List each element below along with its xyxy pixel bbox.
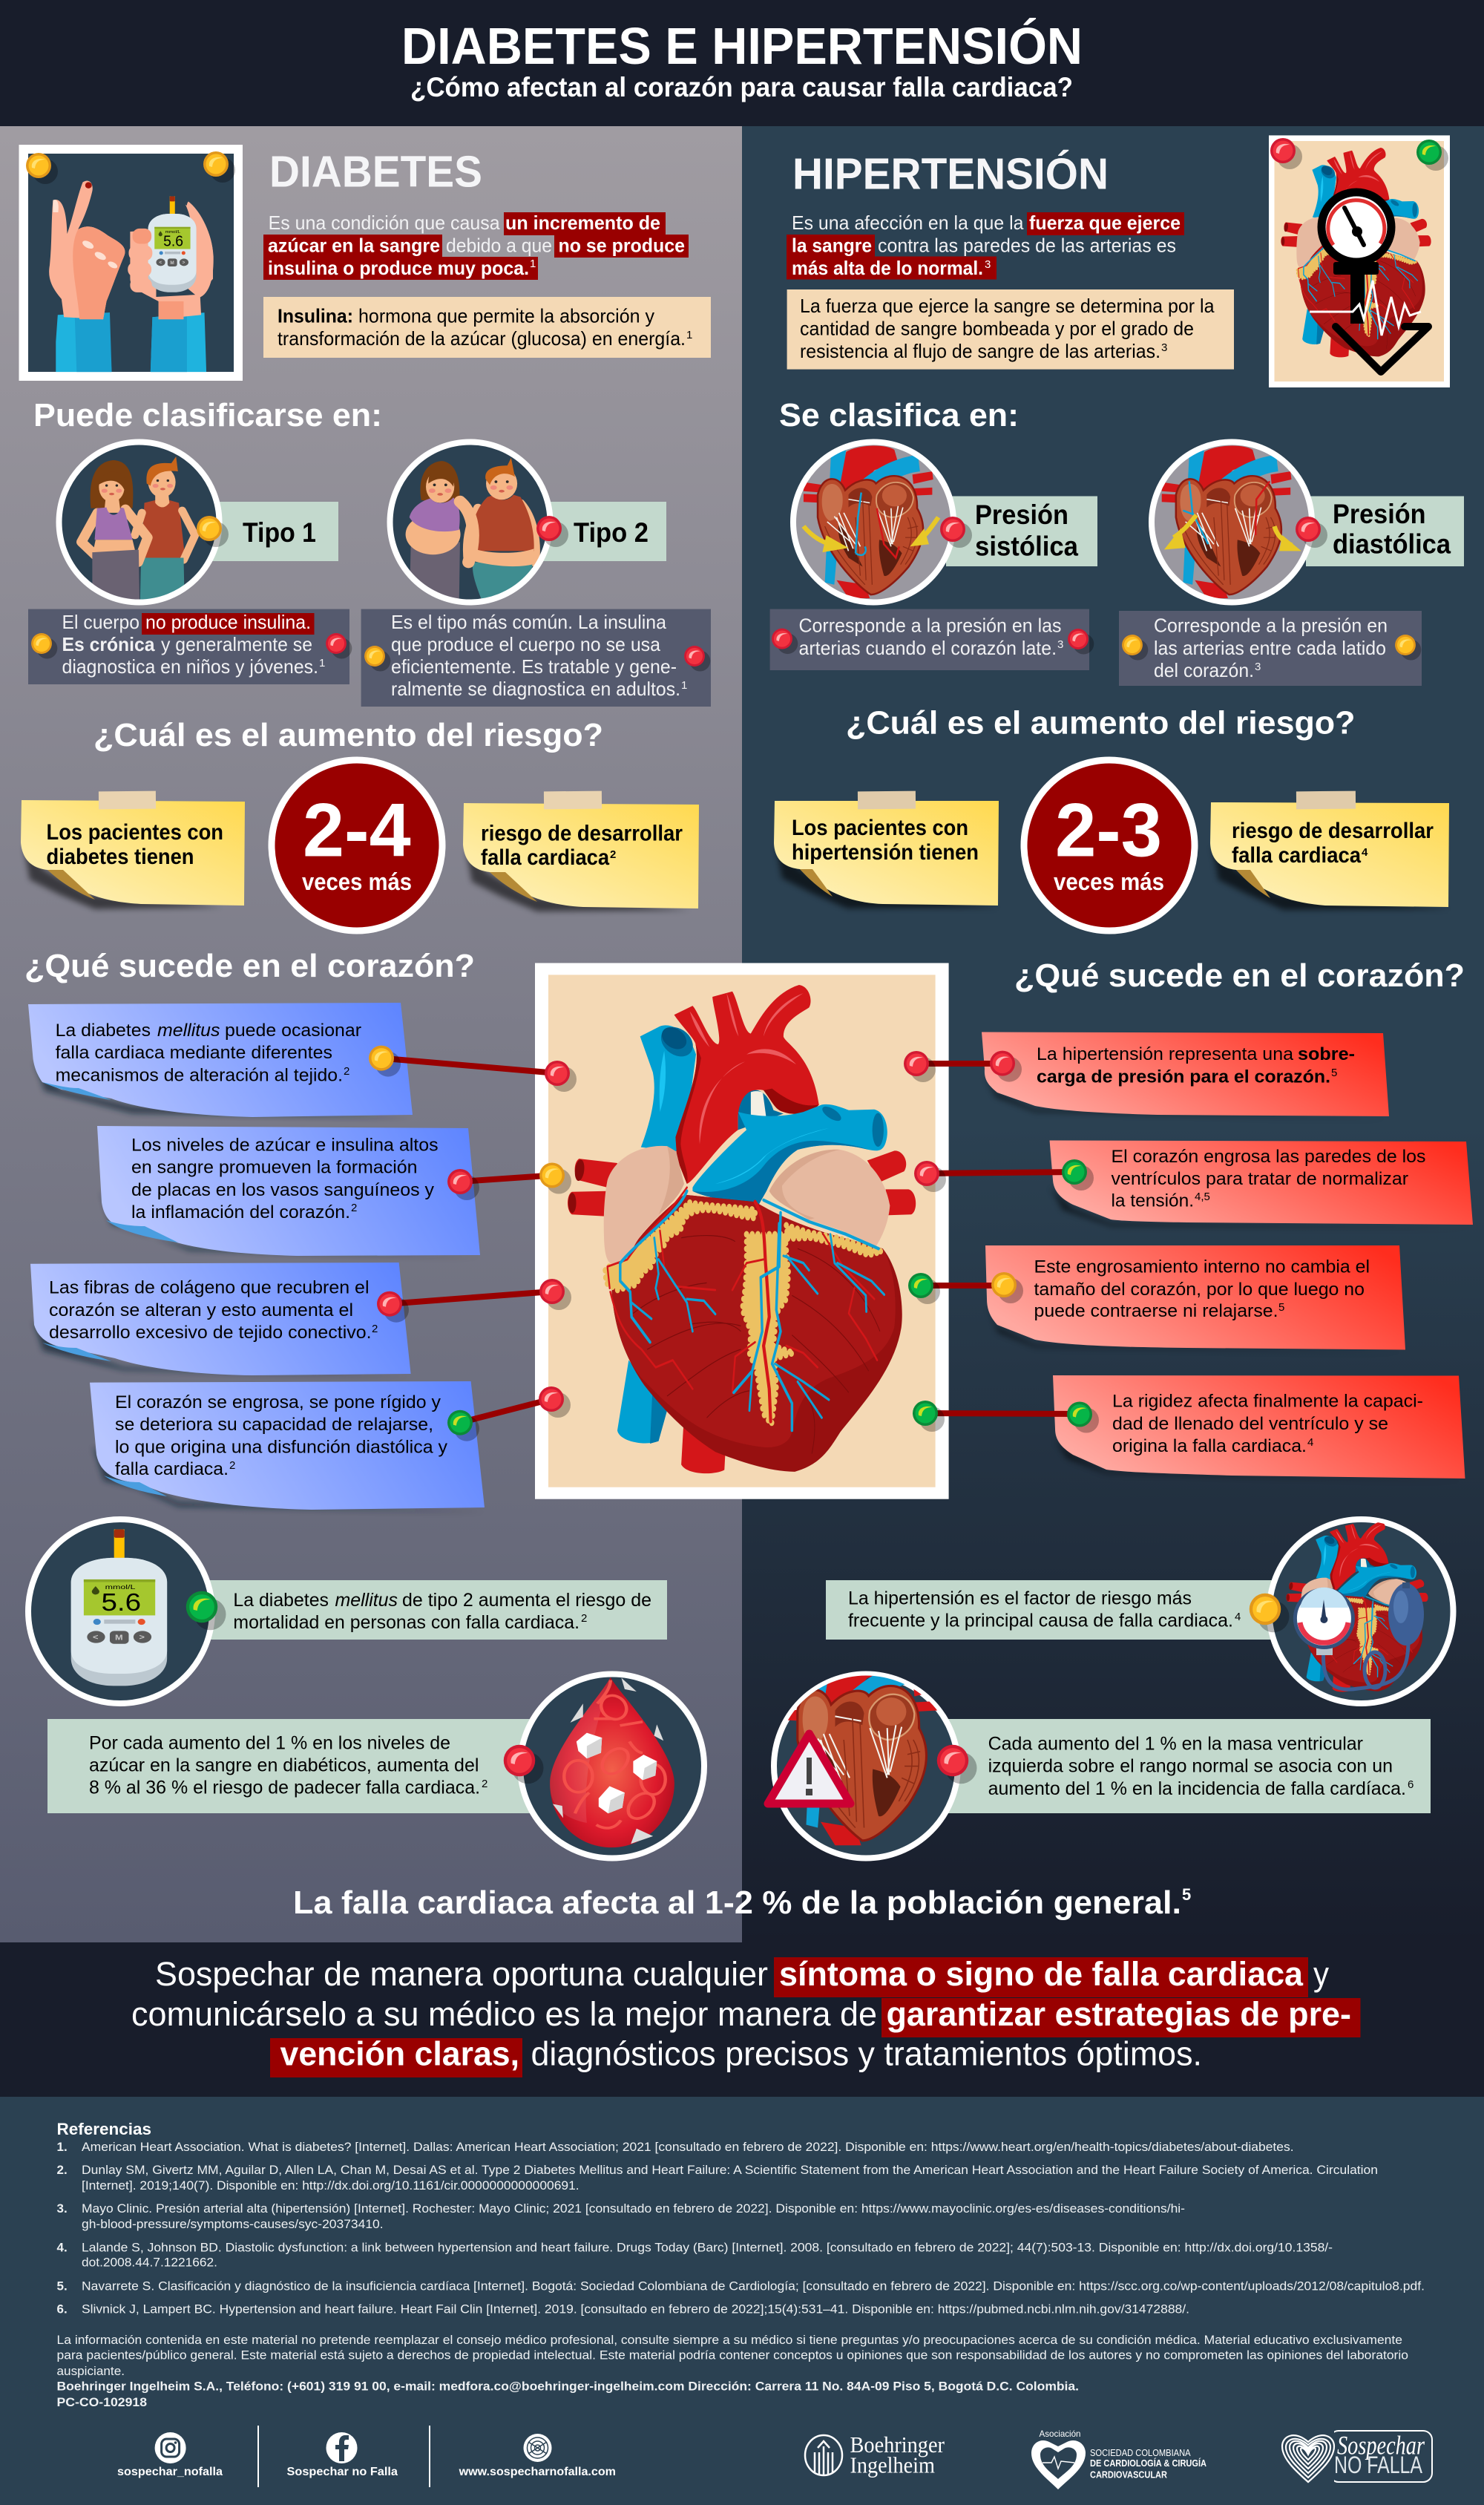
- label: presión diastólica: diastólica: [1333, 528, 1451, 560]
- connector: hipertensión 3: [908, 1272, 1023, 1304]
- references: dot.2008.44.7.1221662.: [82, 2256, 217, 2270]
- disclaimer: para pacientes/público general. Este material está sujeto a derechos de propiedad intelectual. Este material podría contener conceptos u opiniones que son responsabilidad de los autores y no comprometen las opiniones del laboratorio: [56, 2348, 1408, 2362]
- header band: [0, 0, 1484, 126]
- social: web: [459, 2434, 616, 2478]
- heading: diabetes: DIABETES: [269, 147, 482, 196]
- icon: corazón diástole: [1152, 442, 1312, 603]
- callout: aumento azúcar: Por cada aumento del 1 % en los niveles de: [89, 1732, 450, 1753]
- callout: fuerza: 3: [1161, 341, 1167, 354]
- label: presión sistólica: [946, 496, 1097, 566]
- stat: 2-4 veces más: [272, 760, 442, 931]
- note: diabetes 4: falla cardiaca.: [115, 1459, 229, 1479]
- connector: hipertensión 4: [913, 1401, 1099, 1432]
- banner: mensaje final: [0, 1942, 1484, 2097]
- references: American Heart Association. What is diabetes? [Internet]. Dallas: American Heart Association; 2021 [consultado en febrero de 2022]. Disponible en: https://www.heart.org/en/health-topics/diabetes/about-diabetes.: [82, 2140, 1294, 2154]
- callout: aumento azúcar: 8 % al 36 % el riesgo de padecer falla cardiaca.: [89, 1778, 480, 1798]
- stat: 2-3 veces más: [1024, 760, 1195, 931]
- note: hipertensión 4: 4: [1307, 1436, 1313, 1449]
- pin: [186, 1591, 226, 1630]
- label: tipo 1: Tipo 1: [243, 517, 316, 548]
- note: diabetes 1: [28, 1003, 413, 1118]
- sticky note: riesgo hipertensión: falla cardiaca: [1232, 843, 1361, 868]
- sticky note: riesgo diabetes: falla cardiaca: [481, 845, 609, 870]
- sticky note: riesgo diabetes: riesgo de desarrollar: [481, 821, 683, 846]
- callout: mortalidad: de tipo 2 aumenta el riesgo de: [402, 1590, 651, 1611]
- icon: corazón con alerta: [768, 1646, 958, 1859]
- note: hipertensión 3: puede contraerse ni relajarse.: [1034, 1301, 1278, 1321]
- note: diabetes 2: en sangre promueven la formación: [131, 1158, 417, 1178]
- text block: diastólica: [1119, 611, 1422, 686]
- note: hipertensión 3: tamaño del corazón, por lo que luego no: [1034, 1280, 1365, 1300]
- note: hipertensión 2: El corazón engrosa las paredes de los: [1112, 1147, 1426, 1167]
- heading: se clasifica: Se clasifica en:: [779, 397, 1019, 433]
- note: hipertensión 1: La hipertensión representa una: [1037, 1044, 1293, 1064]
- sticky note: riesgo hipertensión: 4: [1362, 846, 1368, 859]
- references: Dunlay SM, Givertz MM, Aguilar D, Allen LA, Chan M, Desai AS et al. Type 2 Diabetes Mellitus and Heart Failure: A Scientific Statement from the American Heart Association and the Heart Failure Society of America. Circulation: [82, 2163, 1378, 2177]
- references: [56, 2120, 1425, 2316]
- callout: mortalidad: [200, 1580, 667, 1640]
- panel: hipertensión background: [742, 126, 1484, 1942]
- text block: diastólica: del corazón.: [1154, 659, 1254, 681]
- stat: 2-3 veces más: veces más: [1054, 868, 1164, 895]
- pin: [937, 1745, 976, 1784]
- label: presión diastólica: Presión: [1333, 499, 1426, 529]
- logo: Sospechar no falla: NO FALLA: [1334, 2452, 1423, 2478]
- note: hipertensión 2: 4,5: [1195, 1191, 1210, 1203]
- callout: mortalidad: mortalidad en personas con falla cardiaca.: [233, 1612, 580, 1633]
- callout: insulina: transformación de la azúcar (glucosa) en energía.: [278, 327, 686, 350]
- logo: Boehringer Ingelheim: Boehringer: [850, 2432, 945, 2457]
- icon: corazón con tensiómetro: [1269, 1519, 1453, 1703]
- icon: gota de sangre: [520, 1674, 704, 1859]
- text block: tipo 1: 1: [319, 657, 325, 669]
- logo: Sociedad Colombiana de Cardiología: SOCIEDAD COLOMBIANA: [1090, 2448, 1191, 2458]
- references: 4.: [56, 2240, 68, 2255]
- banner: mensaje final: garantizar estrategias de pre-: [886, 1995, 1351, 2033]
- heading: aumento del riesgo diabetes: ¿Cuál es el aumento del riesgo?: [93, 717, 603, 753]
- references: Slivnick J, Lampert BC. Hypertension and heart failure. Heart Fail Clin [Internet]. 2019. [consultado en febrero de 2022];15(4):531–41. Disponible en: https://pubmed.ncbi.nlm.nih.gov/31472888/.: [82, 2302, 1189, 2316]
- callout: insulina: Insulina:: [278, 304, 353, 327]
- text block: tipo 1: no produce insulina.: [145, 611, 311, 633]
- callout: insulina: [263, 297, 711, 358]
- note: diabetes 4: lo que origina una disfunción diastólica y: [115, 1437, 448, 1457]
- panel: footer background: [0, 2097, 1484, 2505]
- note: hipertensión 2: la tensión.: [1112, 1191, 1194, 1211]
- statement: prevalencia: La falla cardiaca afecta al 1-2 % de la población general.: [293, 1885, 1181, 1921]
- note: diabetes 4: [90, 1381, 486, 1512]
- note: diabetes 1: mellitus: [157, 1021, 220, 1041]
- label: tipo 1: [211, 502, 338, 561]
- pin: [1296, 517, 1327, 548]
- disclaimer: La información contenida en este material no pretende reemplazar el consejo médico profesional, consulte siempre a su médico si tiene preguntas y/o preocupaciones acerca de su condición médica. Material educativo exclusivamente: [56, 2333, 1402, 2347]
- note: hipertensión 1: sobre-: [1298, 1044, 1355, 1064]
- text block: hipertensión definition: 3: [985, 258, 991, 271]
- sticky note: riesgo diabetes: 2: [610, 848, 616, 861]
- sticky note: pacientes diabetes: [21, 791, 245, 909]
- callout: insulina: 1: [686, 329, 692, 341]
- social: instagram: [117, 2432, 223, 2478]
- callout: fuerza: La fuerza que ejerce la sangre se determina por la: [800, 295, 1215, 317]
- references: gh-blood-pressure/symptoms-causes/syc-20373410.: [82, 2217, 384, 2231]
- text block: diastólica: las arterias entre cada latido: [1154, 637, 1386, 659]
- note: diabetes 3: 2: [372, 1323, 378, 1335]
- social: instagram: sospechar_nofalla: [117, 2466, 223, 2478]
- text block: tipo 2: 1: [681, 679, 687, 692]
- note: hipertensión 3: [985, 1245, 1405, 1352]
- callout: aumento azúcar: azúcar en la sangre en diabéticos, aumenta del: [89, 1755, 479, 1776]
- sticky note: pacientes hipertensión: hipertensión tienen: [792, 840, 979, 865]
- heading: qué sucede hipertensión: ¿Qué sucede en el corazón?: [1014, 957, 1465, 994]
- logo: Sospechar no falla: [1282, 2427, 1432, 2485]
- text block: tipo 1: [28, 609, 352, 684]
- statement: prevalencia: 5: [1182, 1885, 1191, 1904]
- label: tipo 2: [542, 502, 666, 561]
- pin: [203, 151, 235, 183]
- label: presión diastólica: [1306, 496, 1464, 566]
- pin: [504, 1745, 543, 1784]
- note: hipertensión 1: [982, 1032, 1389, 1119]
- banner: mensaje final: comunicárselo a su médico es la mejor manera de: [131, 1995, 877, 2033]
- text block: sistólica: [770, 609, 1094, 670]
- references: 1.: [56, 2140, 68, 2154]
- references: 6.: [56, 2302, 68, 2316]
- heading: aumento del riesgo hipertensión: ¿Cuál es el aumento del riesgo?: [846, 705, 1355, 741]
- references: [Internet]. 2019;140(7). Disponible en: http://dx.doi.org/10.1161/cir.0000000000000691.: [82, 2178, 580, 2193]
- label: tipo 2: Tipo 2: [574, 517, 649, 548]
- pin: [1250, 1594, 1290, 1632]
- callout: aumento azúcar: [47, 1719, 537, 1813]
- connector: hipertensión 1: [904, 1051, 1022, 1082]
- banner: mensaje final: vención claras,: [280, 2035, 519, 2072]
- sticky note: pacientes hipertensión: Los pacientes con: [792, 816, 968, 840]
- pin: [197, 516, 229, 547]
- text block: hipertensión definition: la sangre: [792, 235, 872, 257]
- references: 2.: [56, 2163, 68, 2177]
- note: diabetes 1: La diabetes: [56, 1021, 151, 1041]
- references: 5.: [56, 2279, 68, 2293]
- note: diabetes 1: mecanismos de alteración al tejido.: [56, 1066, 343, 1085]
- references: Lalande S, Johnson BD. Diastolic dysfunction: a link between hypertension and heart failure. Drugs Today (Barc) [Internet]. 2008. [consultado en febrero de 2022]; 44(7):503-13. Disponible en: http://dx.doi.org/10.1358/-: [82, 2240, 1333, 2255]
- logo: Sociedad Colombiana de Cardiología: DE CARDIOLOGÍA & CIRUGÍA: [1090, 2457, 1206, 2469]
- note: diabetes 2: de placas en los vasos sanguíneos y: [131, 1180, 435, 1200]
- sticky note: pacientes diabetes: diabetes tienen: [46, 845, 194, 869]
- note: diabetes 1: 2: [344, 1065, 349, 1078]
- note: hipertensión 3: 5: [1278, 1301, 1284, 1314]
- pin: [26, 153, 58, 184]
- callout: factor de riesgo: La hipertensión es el factor de riesgo más: [848, 1588, 1192, 1609]
- stat: 2-3 veces más: 2-3: [1055, 788, 1162, 873]
- heading: puede clasificarse: Puede clasificarse en:: [33, 397, 382, 433]
- text block: diabetes definition: insulina o produce muy poca.: [268, 257, 529, 279]
- note: hipertensión 4: origina la falla cardiaca.: [1112, 1436, 1307, 1456]
- disclaimer: auspiciante.: [56, 2364, 125, 2378]
- text block: tipo 1: diagnostica en niños y jóvenes.: [62, 655, 318, 678]
- text block: diabetes definition: [263, 212, 689, 280]
- references: 3.: [56, 2201, 68, 2216]
- note: diabetes 3: Las fibras de colágeno que recubren el: [49, 1278, 370, 1298]
- callout: mortalidad: 2: [581, 1612, 587, 1625]
- banner: mensaje final: Sospechar de manera oportuna cualquier: [155, 1955, 768, 1993]
- pin: [940, 517, 972, 548]
- heading: qué sucede diabetes: ¿Qué sucede en el corazón?: [24, 948, 475, 984]
- note: diabetes 3: corazón se alteran y esto aumenta el: [49, 1300, 353, 1320]
- connector: diabetes 1: [369, 1046, 577, 1092]
- text block: diabetes definition: azúcar en la sangre: [268, 235, 440, 257]
- logo: Sociedad Colombiana de Cardiología: [1031, 2429, 1206, 2489]
- connector: hipertensión 2: [914, 1159, 1094, 1192]
- note: hipertensión 2: [1049, 1140, 1473, 1228]
- references: Referencias: [56, 2120, 151, 2138]
- sticky note: pacientes hipertensión: [774, 791, 999, 908]
- note: diabetes 4: se deteriora su capacidad de relajarse,: [115, 1415, 433, 1435]
- text block: diabetes definition: debido a que: [446, 235, 552, 257]
- note: hipertensión 4: [1053, 1375, 1465, 1481]
- text block: sistólica: arterias cuando el corazón late.: [798, 637, 1057, 659]
- panel: diabetes background: [0, 126, 742, 1942]
- callout: insulina: hormona que permite la absorción y: [358, 304, 654, 327]
- text block: hipertensión definition: Es una afección en la que la: [792, 212, 1024, 234]
- logo: Sospechar no falla: Sospechar: [1337, 2431, 1425, 2460]
- text block: tipo 1: y generalmente se: [161, 633, 312, 655]
- text block: tipo 1: El cuerpo: [62, 611, 139, 633]
- banner: mensaje final: diagnósticos precisos y tratamientos óptimos.: [531, 2035, 1202, 2072]
- callout: mortalidad: mellitus: [335, 1590, 398, 1611]
- heading: hipertensión: HIPERTENSIÓN: [792, 150, 1109, 199]
- icon: delgados tipo 1: [59, 442, 220, 605]
- callout: aumento azúcar: 2: [482, 1778, 487, 1790]
- note: diabetes 2: la inflamación del corazón.: [131, 1202, 350, 1222]
- note: diabetes 3: [30, 1263, 411, 1377]
- title: DIABETES E HIPERTENSIÓN: [401, 17, 1083, 75]
- note: hipertensión 4: La rigidez afecta finalmente la capaci-: [1112, 1392, 1423, 1412]
- sticky note: riesgo diabetes: [463, 791, 699, 911]
- text block: sistólica: Corresponde a la presión en las: [798, 615, 1061, 637]
- callout: factor de riesgo: frecuente y la principal causa de falla cardiaca.: [848, 1611, 1233, 1631]
- sticky note: riesgo hipertensión: [1210, 791, 1449, 910]
- text block: tipo 2: Es el tipo más común. La insulina: [391, 611, 667, 633]
- callout: masa ventricular: Cada aumento del 1 % en la masa ventricular: [988, 1734, 1363, 1755]
- logo: Boehringer Ingelheim: Ingelheim: [850, 2452, 935, 2478]
- note: hipertensión 4: dad de llenado del ventrículo y se: [1112, 1414, 1388, 1434]
- logo: Boehringer Ingelheim: [805, 2432, 945, 2478]
- illustration: anatomical heart: [568, 985, 916, 1473]
- callout: fuerza: cantidad de sangre bombeada y por el grado de: [800, 318, 1194, 340]
- banner: mensaje final: y: [1313, 1955, 1329, 1993]
- sticky note: riesgo hipertensión: riesgo de desarrollar: [1232, 819, 1434, 843]
- text block: tipo 2: eficientemente. Es tratable y gene-: [391, 655, 677, 678]
- text block: tipo 2: ralmente se diagnostica en adultos.: [391, 678, 680, 700]
- text block: diabetes definition: un incremento de: [505, 212, 660, 234]
- text block: diastólica: Corresponde a la presión en: [1154, 615, 1388, 637]
- text block: hipertensión definition: fuerza que ejerce: [1029, 212, 1181, 234]
- central heart panel: [535, 963, 949, 1499]
- callout: fuerza: resistencia al flujo de sangre de las arterias.: [800, 340, 1160, 362]
- icon: corazón sístole: [793, 442, 953, 603]
- social: facebook: [286, 2432, 398, 2478]
- callout: masa ventricular: izquierda sobre el rango normal se asocia con un: [988, 1756, 1393, 1777]
- text block: diabetes definition: Es una condición que causa: [269, 212, 500, 234]
- callout: masa ventricular: [946, 1719, 1431, 1813]
- note: diabetes 4: 2: [229, 1459, 235, 1472]
- connector: diabetes 3: [377, 1279, 571, 1323]
- pin: [536, 516, 568, 547]
- note: hipertensión 1: carga de presión para el corazón.: [1037, 1067, 1330, 1087]
- note: hipertensión 3: Este engrosamiento interno no cambia el: [1034, 1257, 1370, 1277]
- callout: mortalidad: La diabetes: [233, 1590, 329, 1611]
- text block: hipertensión definition: más alta de lo normal.: [792, 257, 983, 279]
- note: hipertensión 2: ventrículos para tratar de normalizar: [1112, 1169, 1408, 1189]
- label: presión sistólica: Presión: [975, 500, 1068, 530]
- text block: hipertensión definition: contra las paredes de las arterias es: [878, 235, 1176, 257]
- logo: Sociedad Colombiana de Cardiología: CARDIOVASCULAR: [1090, 2470, 1167, 2481]
- note: diabetes 4: El corazón se engrosa, se pone rígido y: [115, 1392, 441, 1412]
- icon: obesos tipo 2: [390, 442, 551, 605]
- text block: diabetes definition: no se produce: [558, 235, 685, 257]
- note: hipertensión 1: 5: [1331, 1067, 1337, 1079]
- note: diabetes 1: puede ocasionar: [225, 1021, 361, 1041]
- disclaimer: Boehringer Ingelheim S.A., Teléfono: (+601) 319 91 00, e-mail: medfora.co@boehringer-ingelheim.com Dirección: Carrera 11 No. 84A-09 Piso 5, Bogotá D.C. Colombia.: [56, 2380, 1079, 2394]
- callout: fuerza: [787, 289, 1234, 370]
- banner: mensaje final: síntoma o signo de falla cardiaca: [779, 1955, 1304, 1993]
- icon: glucómetro: [28, 1519, 212, 1703]
- note: diabetes 2: 2: [351, 1202, 357, 1214]
- logo: Sociedad Colombiana de Cardiología: Asociación: [1039, 2429, 1080, 2439]
- note: diabetes 3: desarrollo excesivo de tejido conectivo.: [49, 1323, 372, 1343]
- note: diabetes 2: [97, 1126, 480, 1257]
- text block: tipo 2: [361, 609, 711, 707]
- disclaimer: PC-CO-102918: [56, 2395, 147, 2409]
- text block: tipo 2: que produce el cuerpo no se usa: [391, 633, 661, 655]
- social: facebook: Sospechar no Falla: [286, 2466, 398, 2478]
- disclaimer: [56, 2333, 1408, 2409]
- text block: diastólica: 3: [1255, 661, 1261, 673]
- callout: masa ventricular: aumento del 1 % en la incidencia de falla cardíaca.: [988, 1778, 1406, 1799]
- subtitle: ¿Cómo afectan al corazón para causar falla cardiaca?: [410, 72, 1073, 102]
- image: heart with pressure gauge: [1269, 135, 1450, 387]
- connector: diabetes 4: [447, 1386, 571, 1441]
- note: diabetes 1: falla cardiaca mediante diferentes: [56, 1043, 332, 1063]
- label: presión sistólica: sistólica: [975, 531, 1078, 561]
- callout: factor de riesgo: 4: [1235, 1611, 1241, 1623]
- stat: 2-4 veces más: 2-4: [303, 788, 411, 873]
- sticky note: pacientes diabetes: Los pacientes con: [46, 820, 223, 845]
- callout: masa ventricular: 6: [1408, 1778, 1414, 1791]
- note: diabetes 2: Los niveles de azúcar e insulina altos: [131, 1136, 439, 1155]
- references: Mayo Clinic. Presión arterial alta (hipertensión) [Internet]. Rochester: Mayo Clinic; 2021 [consultado en febrero de 2022]. Disponible en: https://www.mayoclinic.org/es-es/diseases-conditions/hi-: [82, 2201, 1185, 2216]
- callout: factor de riesgo: [826, 1580, 1278, 1640]
- text block: diabetes definition: 1: [530, 258, 536, 270]
- connector: diabetes 2: [447, 1162, 571, 1200]
- text block: sistólica: 3: [1057, 638, 1063, 651]
- text block: hipertensión definition: [787, 212, 1184, 279]
- text block: tipo 1: Es crónica: [62, 633, 155, 655]
- stat: 2-4 veces más: veces más: [302, 868, 412, 895]
- image: hands with glucose meter: [19, 145, 243, 381]
- references: Navarrete S. Clasificación y diagnóstico de la insuficiencia cardíaca [Internet]. Bogotá: Sociedad Colombiana de Cardiología; [consultado en febrero de 2022]. Disponible en: https://scc.org.co/wp-content/uploads/2012/08/capitulo8.pdf.: [82, 2279, 1425, 2293]
- social: web: www.sospecharnofalla.com: [459, 2466, 616, 2478]
